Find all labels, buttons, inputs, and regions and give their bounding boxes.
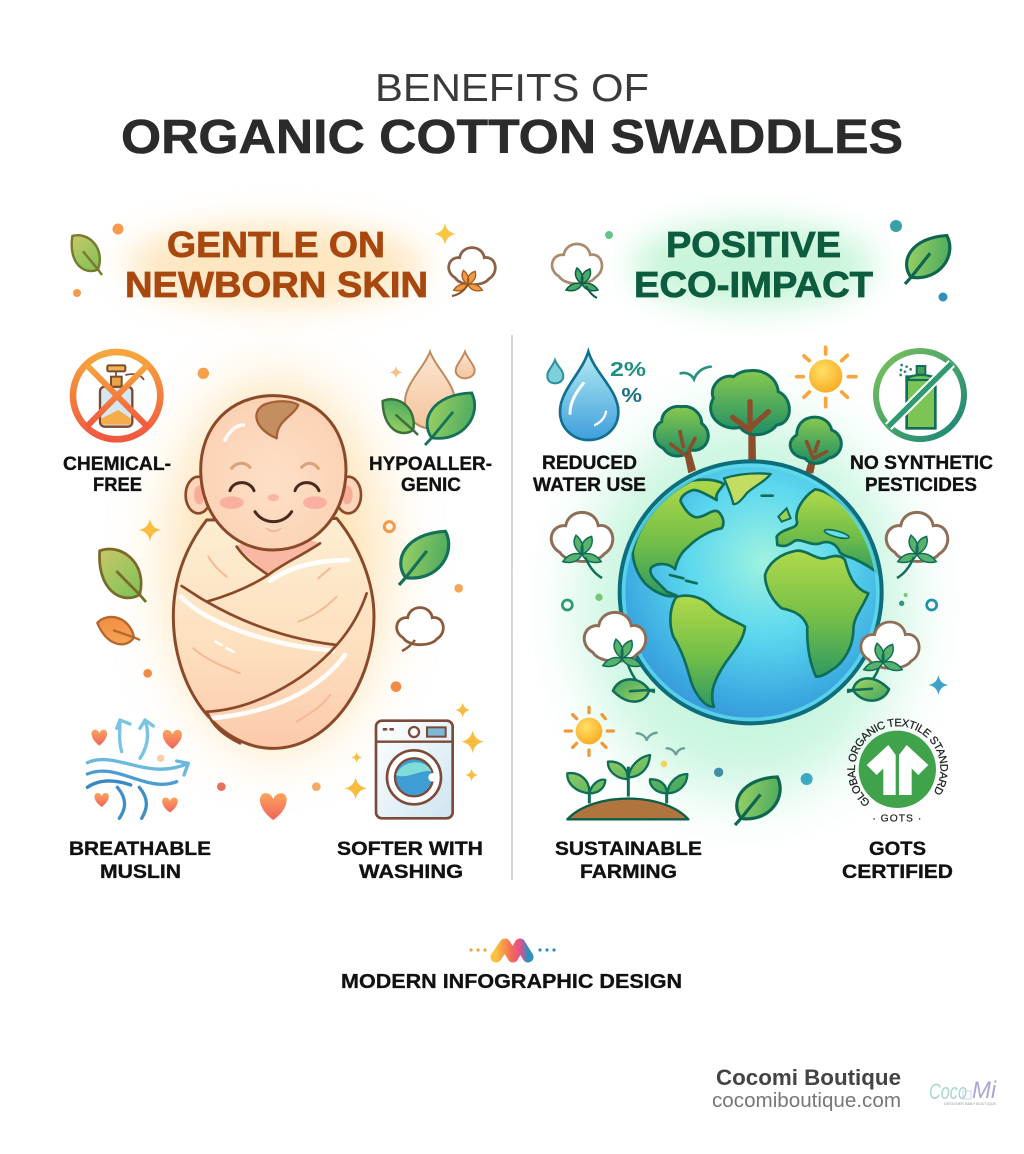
- icon: chemical-free: [73, 352, 160, 439]
- decorative heart and dots: [217, 782, 321, 820]
- badge: GOTS certified: · GOTS ·: [872, 813, 922, 824]
- icon: right leaf: [384, 519, 460, 597]
- boll upper left: [551, 512, 613, 578]
- small accents: [562, 593, 948, 695]
- label: no synthetic pesticides: PESTICIDES: [865, 474, 977, 496]
- heading: gentle on newborn skin: [125, 224, 428, 305]
- icon: cotton boll: [397, 608, 443, 651]
- label: sustainable farming: SUSTAINABLE: [555, 838, 702, 860]
- title: BENEFITS OF: [375, 67, 649, 110]
- icon: water drop: %: [621, 384, 642, 407]
- cotton bolls around globe: [551, 512, 948, 702]
- baby head: [201, 396, 346, 550]
- icon: washing machine: [344, 702, 484, 818]
- heading: positive eco-impact: POSITIVE: [666, 224, 841, 265]
- left panel: baby and icons: [73, 352, 475, 748]
- label: GOTS certified: CERTIFIED: [842, 861, 953, 883]
- label: chemical-free: FREE: [93, 474, 142, 496]
- boll upper right: [886, 512, 948, 578]
- badge: GOTS certified: GLOBAL ORGANIC TEXTILE STANDARD: [847, 718, 948, 806]
- label: softer with washing: SOFTER WITH: [337, 838, 483, 860]
- icon: water drop: [547, 352, 646, 440]
- right panel: globe and icons: [547, 347, 964, 724]
- label: no synthetic pesticides: [850, 452, 993, 496]
- brand logo: Coco: [929, 1079, 967, 1104]
- swaddle body: [173, 518, 374, 748]
- label: reduced water use: [533, 452, 646, 496]
- icon: breathable air: [87, 720, 188, 818]
- boll lower right: [847, 622, 919, 701]
- brand logo: DESIGNER BABY BOUTIQUE: [944, 1101, 996, 1106]
- label: breathable muslin: MUSLIN: [100, 861, 181, 883]
- brand logo: Mi: [972, 1077, 997, 1104]
- brand text: [712, 1065, 901, 1112]
- label: breathable muslin: [69, 838, 211, 883]
- brand logo: [929, 1077, 997, 1106]
- footer caption: MODERN INFOGRAPHIC DESIGN: [341, 971, 682, 993]
- heading: positive eco-impact: [634, 224, 873, 305]
- icon: trees: [654, 371, 841, 473]
- glow: left panel: [168, 380, 384, 750]
- label: hypoallergenic: HYPOALLER-: [369, 453, 492, 475]
- label: softer with washing: [337, 838, 483, 883]
- label: reduced water use: REDUCED: [542, 452, 637, 474]
- label: breathable muslin: BREATHABLE: [69, 838, 211, 860]
- heading decorations: left: [62, 223, 495, 297]
- title: [121, 67, 903, 164]
- label: GOTS certified: [842, 838, 953, 883]
- heading: gentle on newborn skin: NEWBORN SKIN: [125, 264, 428, 305]
- dots and sparkles: [139, 368, 463, 692]
- divider: [511, 335, 513, 880]
- label: chemical-free: [63, 453, 171, 496]
- label: hypoallergenic: GENIC: [401, 474, 461, 496]
- label: reduced water use: WATER USE: [533, 474, 646, 496]
- title: ORGANIC COTTON SWADDLES: [121, 111, 903, 164]
- glow: right heading: [631, 221, 875, 309]
- icon: no pesticides: [876, 351, 964, 439]
- globe: [619, 461, 882, 724]
- icon: water drop: 2%: [610, 358, 646, 381]
- icon: hypoallergenic leaves: [374, 381, 486, 457]
- icon: bird: [681, 367, 711, 379]
- heading: positive eco-impact: ECO-IMPACT: [634, 264, 873, 305]
- brand text: cocomiboutique.com: [712, 1090, 901, 1112]
- icon: left leaves: [86, 538, 159, 652]
- footer logo: [469, 944, 556, 957]
- label: sustainable farming: FARMING: [580, 861, 677, 883]
- icon: sustainable farming: [565, 707, 813, 819]
- icon: sun: [797, 347, 856, 407]
- glow: right panel: [580, 415, 910, 795]
- icon: hypoallergenic: [390, 352, 475, 428]
- icon: bottom leaf: [722, 766, 790, 836]
- brand text: Cocomi Boutique: [716, 1065, 901, 1090]
- label: GOTS certified: GOTS: [869, 838, 926, 860]
- label: hypoallergenic: [369, 453, 492, 496]
- glow: left heading: [125, 223, 425, 307]
- label: no synthetic pesticides: NO SYNTHETIC: [850, 452, 993, 474]
- boll lower left: [584, 612, 655, 702]
- baby ears: [186, 477, 361, 513]
- label: chemical-free: CHEMICAL-: [63, 453, 171, 475]
- label: softer with washing: WASHING: [359, 861, 463, 883]
- heading: gentle on newborn skin: GENTLE ON: [167, 224, 385, 265]
- label: sustainable farming: [555, 838, 702, 883]
- heading decorations: right: [552, 220, 960, 302]
